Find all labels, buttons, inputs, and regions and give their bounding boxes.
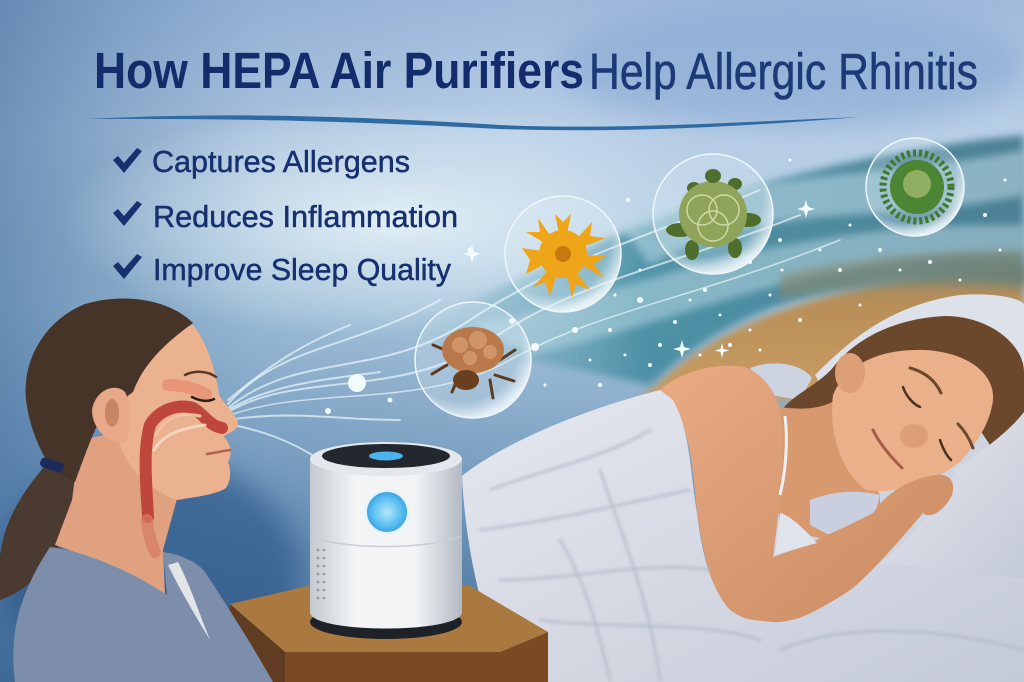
face	[832, 350, 993, 491]
neck	[55, 430, 178, 595]
nasal passages	[146, 385, 222, 552]
arm	[660, 366, 953, 622]
bed sheet backing	[690, 390, 1024, 682]
benefits checklist	[113, 144, 458, 287]
vent holes	[317, 549, 325, 599]
small pillow behind shoulder	[750, 363, 812, 400]
ear	[835, 353, 865, 393]
blanket fold near arm	[775, 513, 817, 555]
facial features	[873, 368, 973, 468]
check item: captures allergens: Captures Allergens	[152, 144, 410, 179]
face	[115, 325, 238, 500]
eyebrow	[185, 372, 216, 377]
airborne particles	[325, 158, 1006, 414]
airflow streams	[228, 190, 840, 460]
ponytail	[0, 462, 75, 600]
bubble: pollen flower	[505, 196, 621, 312]
small pillow under chin	[810, 492, 880, 538]
camisole strap	[780, 416, 786, 495]
top indicator light	[369, 452, 403, 460]
closed eye	[192, 397, 214, 401]
front pillow	[880, 412, 1024, 578]
bedside table	[230, 586, 548, 682]
woman with nasal anatomy	[0, 298, 273, 682]
nose	[900, 424, 928, 448]
bubble: mold spore	[866, 138, 964, 236]
front power button	[366, 491, 408, 533]
hair	[780, 316, 1024, 445]
title	[94, 42, 978, 100]
bubble: dust mite	[415, 302, 531, 418]
hair tie	[39, 457, 65, 473]
back pillow	[815, 294, 1024, 400]
bubble: green mite	[653, 154, 773, 274]
shirt collar	[168, 562, 210, 640]
chest and neck	[770, 400, 880, 540]
ear	[92, 388, 130, 443]
background waves and warm bedroom wall	[390, 135, 1024, 400]
sweater	[13, 547, 273, 682]
blanket	[462, 390, 1024, 682]
hair	[26, 298, 193, 482]
title swoosh underline	[88, 115, 860, 130]
mouth	[207, 450, 230, 454]
sleeping woman	[660, 316, 1024, 622]
title: How HEPA Air Purifiers	[94, 42, 584, 99]
check item: reduces inflammation: Reduces Inflammation	[153, 199, 458, 234]
check item: improve sleep quality: Improve Sleep Quality	[153, 252, 451, 287]
air purifier	[310, 442, 462, 639]
